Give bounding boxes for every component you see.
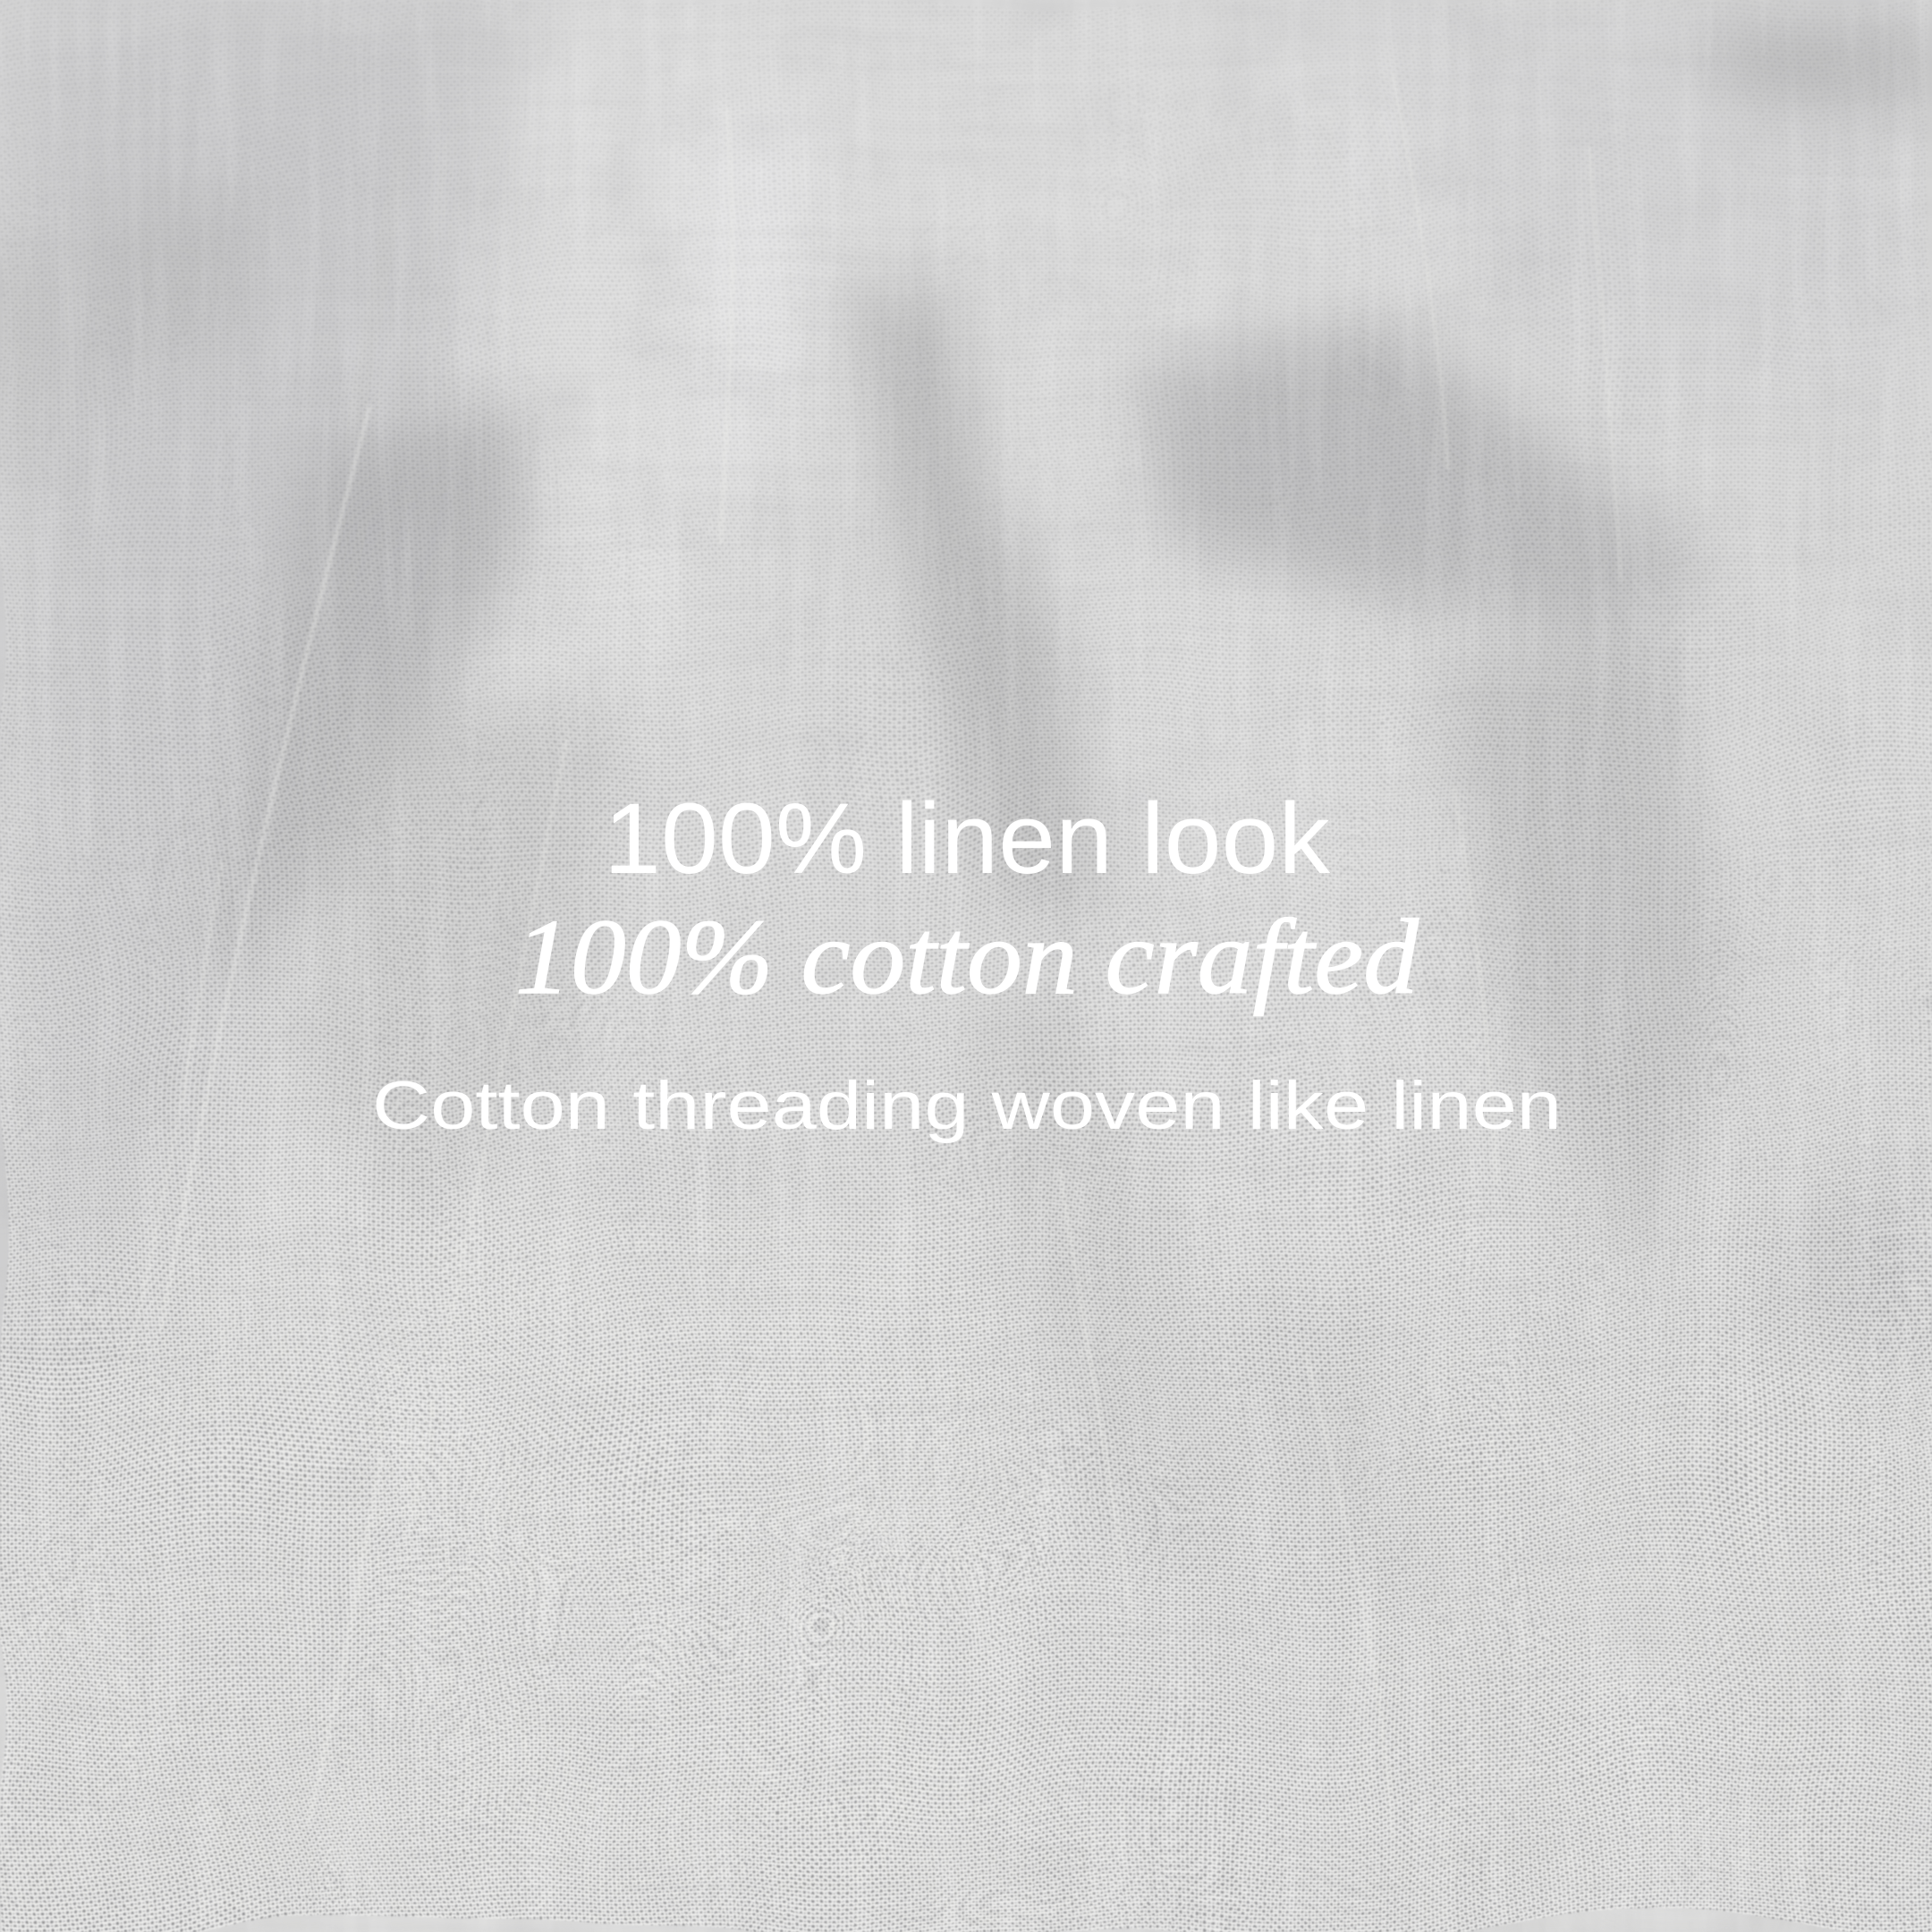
heading: 100% linen look: 100% linen look (604, 783, 1331, 894)
headline text block (372, 783, 1562, 1144)
slub threads (123, 74, 1620, 1836)
caption: cotton threading woven like linen: Cotton threading woven like linen (372, 1068, 1562, 1144)
subheading: 100% cotton crafted: 100% cotton crafted (515, 897, 1419, 1016)
